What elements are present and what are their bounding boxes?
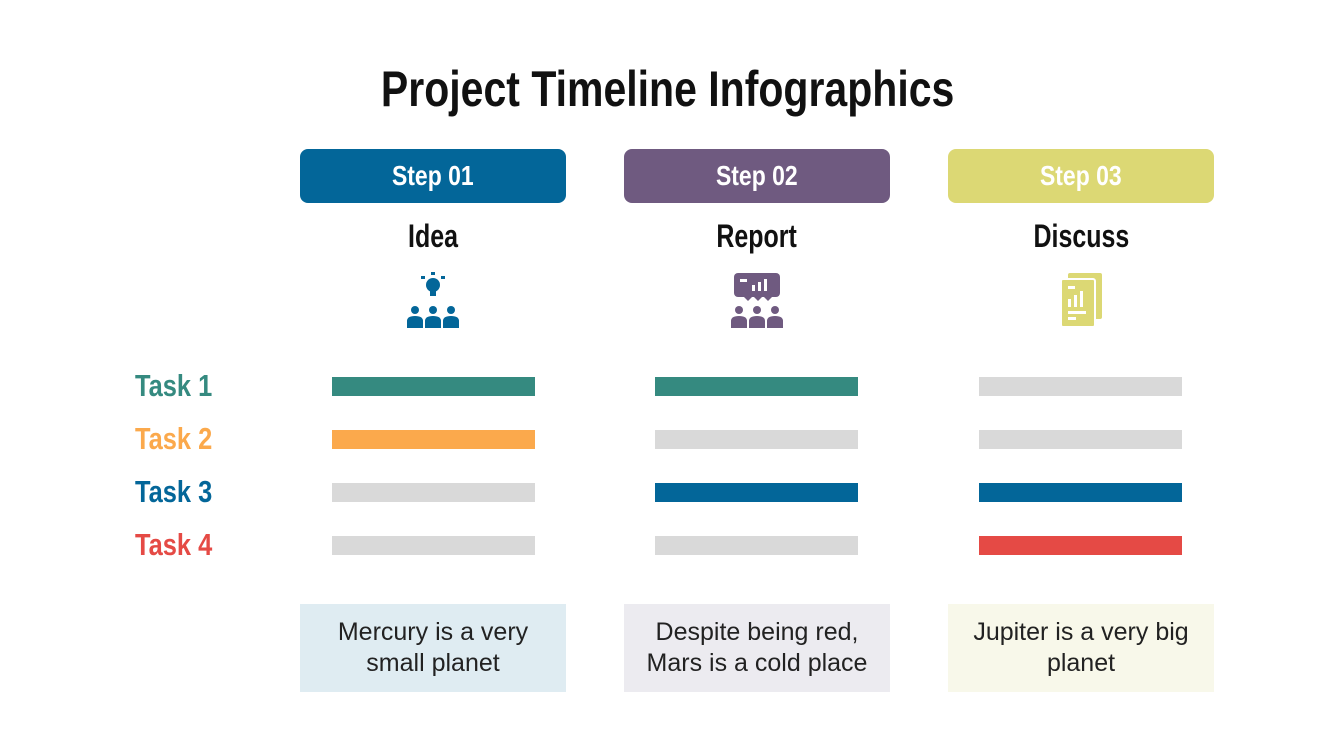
bars: step 01 <box>332 377 535 555</box>
bars: step 03 <box>979 377 1182 555</box>
task labels: Task 2 <box>135 421 212 456</box>
heading: Discuss: Discuss <box>1033 218 1129 254</box>
note: Jupiter: planet <box>1047 649 1115 677</box>
heading: Idea: Idea <box>408 218 458 254</box>
note: Mars: Despite being red, <box>656 618 858 646</box>
heading: Report: Report <box>717 218 797 254</box>
task labels <box>135 368 212 562</box>
title: Project Timeline Infographics <box>381 61 955 117</box>
task labels: Task 3 <box>135 474 212 509</box>
task labels: Task 4 <box>135 527 212 562</box>
step 02 header <box>624 149 890 203</box>
note: Jupiter: Jupiter is a very big <box>973 618 1189 646</box>
bars: step 02 <box>655 377 858 555</box>
note: Mercury: Mercury is a very <box>338 618 528 646</box>
note: Mars: Mars is a cold place <box>647 649 867 677</box>
step 01 header: Step 01 <box>392 160 474 191</box>
step 02 header: Step 02 <box>716 160 798 191</box>
step 01 header <box>300 149 566 203</box>
step 03 header <box>948 149 1214 203</box>
note: Mars <box>624 604 890 692</box>
icon: documents <box>1062 273 1102 326</box>
note: Mercury <box>300 604 566 692</box>
task labels: Task 1 <box>135 368 212 403</box>
step 03 header: Step 03 <box>1040 160 1122 191</box>
icon: idea team <box>407 272 459 328</box>
note: Jupiter <box>948 604 1214 692</box>
note: Mercury: small planet <box>366 649 500 677</box>
icon: report team <box>731 273 783 328</box>
